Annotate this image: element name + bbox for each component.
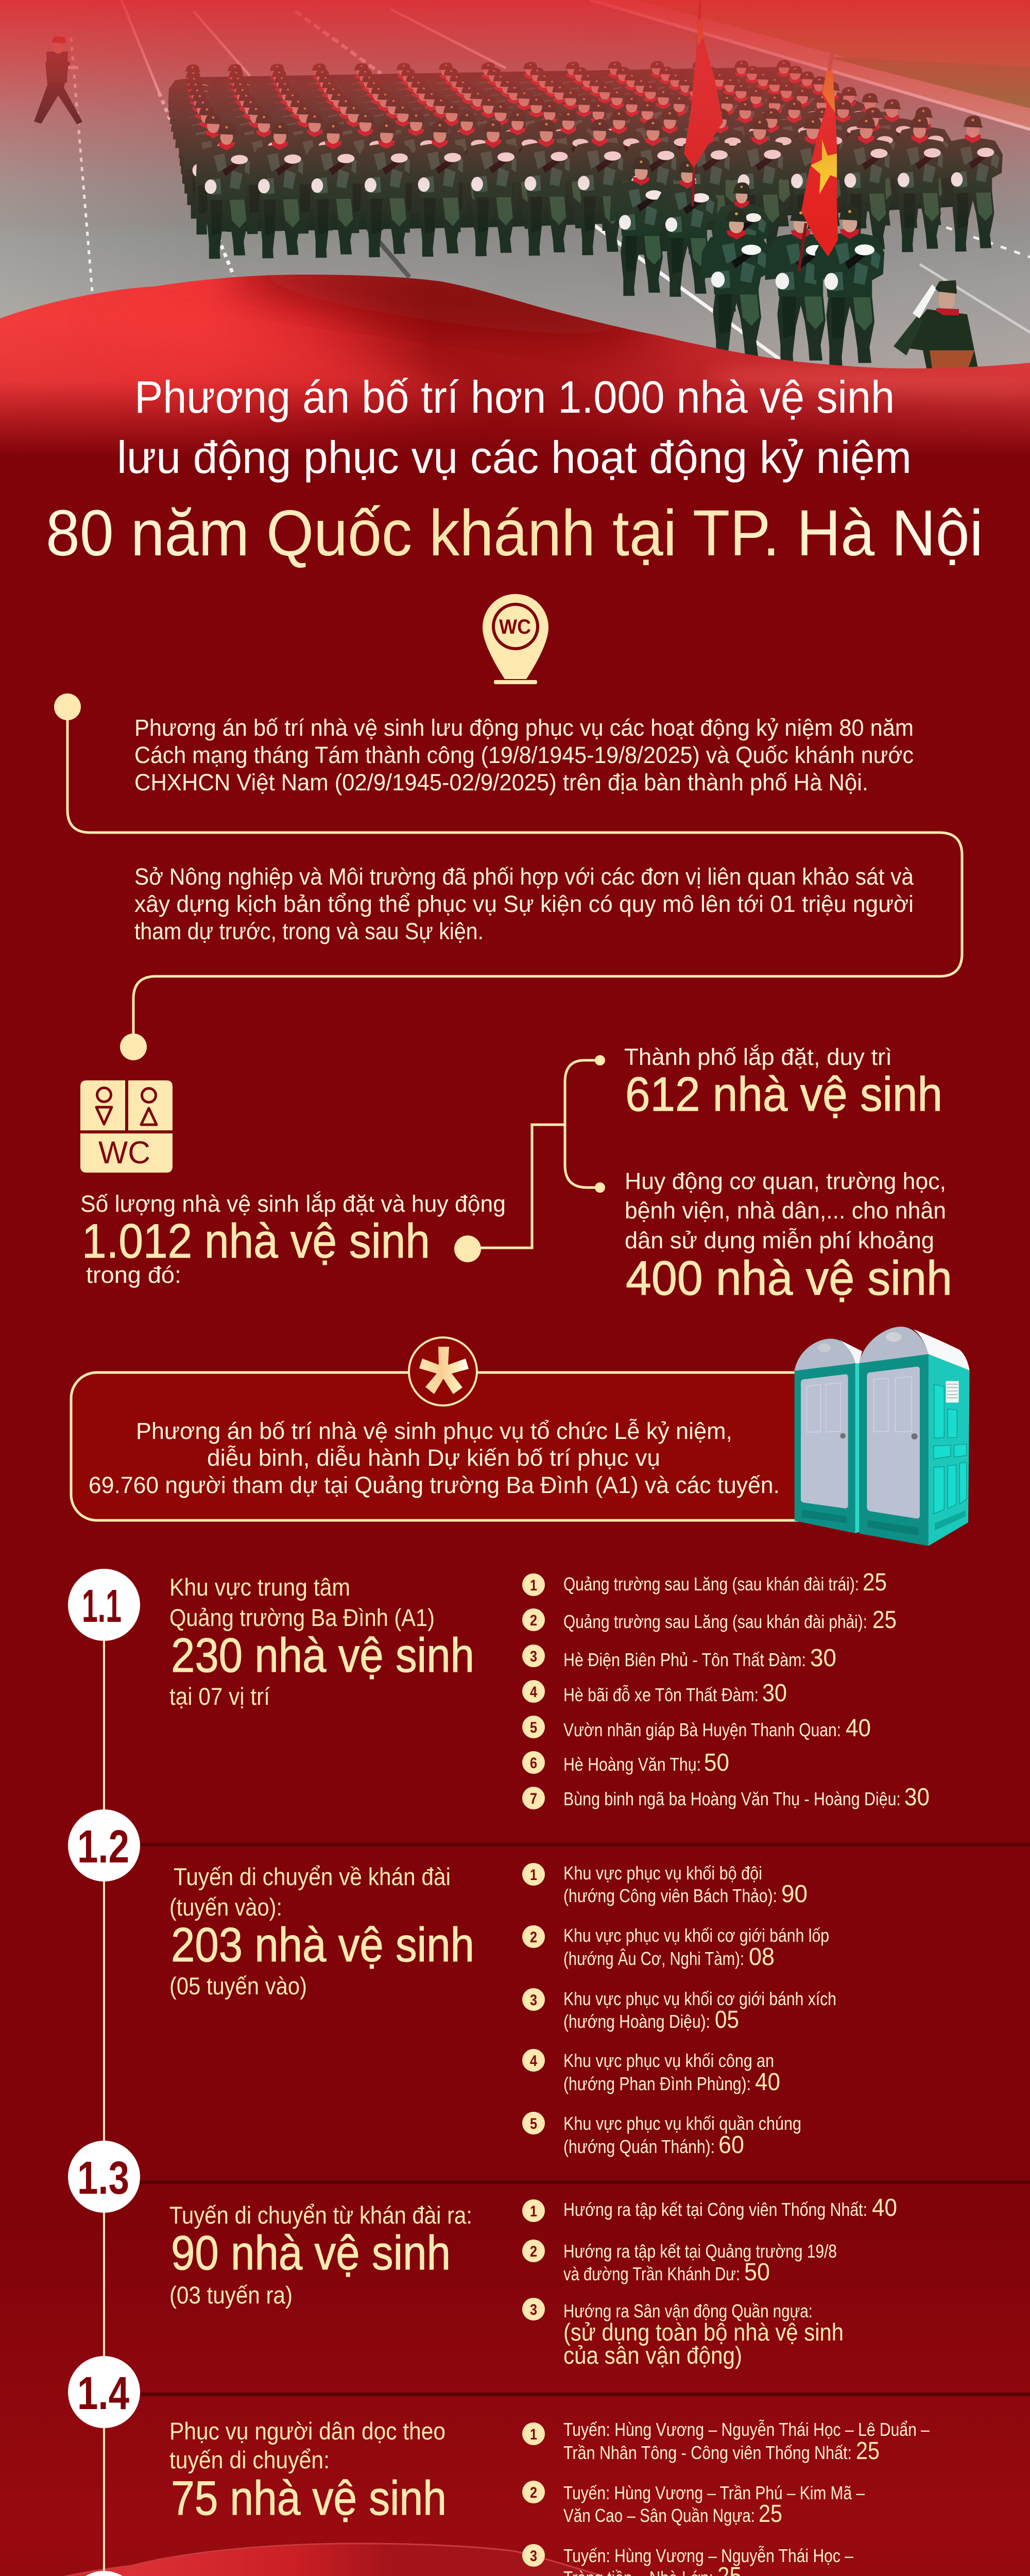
marching block of soldiers [168,60,1003,259]
list item 1.2.5: 5 [530,2115,537,2132]
callout text: Phương án bố trí nhà vệ sinh phục vụ tổ chức Lễ kỷ niệm, [136,1418,732,1444]
list item 1.1.2: Quảng trường sau Lăng (sau khán đài phải): [563,1611,867,1632]
icon: WC location pin [483,594,548,684]
list item 1.2.3: Khu vực phục vụ khối cơ giới bánh xích [563,1988,836,2009]
list item 1.1.5: 5 [530,1719,537,1736]
total count block: trong đó: [86,1262,181,1288]
list item 1.3.2: 2 [530,2243,537,2260]
list item 1.3.1: 1 [530,2203,537,2220]
text block: intro paragraph 2 [134,863,914,944]
text block: intro paragraph 2: xây dựng kịch bản tổng thể phục vụ Sự kiện có quy mô lên tới 01 triệu người [134,891,914,917]
list item 1.1.1 [522,1569,887,1596]
badge 1.2 [68,1809,140,1882]
list item 1.3.2: và đường Trần Khánh Dư: [563,2263,740,2284]
list item 1.1.6: 50 [704,1749,729,1776]
heading 1.3 [169,2201,472,2309]
branch: mobilised: bệnh viện, nhà dân,... cho nhân [625,1197,946,1224]
badge 1.2: 1.2 [77,1821,129,1873]
branch: city installed: 612 nhà vệ sinh [625,1067,942,1121]
title: lưu động phục vụ các hoạt động kỷ niệm [117,432,912,483]
red tint overlay on photo [0,0,1030,237]
list item 1.2.2 [522,1925,829,1971]
section 1.3 [68,2141,897,2369]
officer walking alongside [34,36,82,125]
heading 1.1 [169,1573,474,1710]
text block: intro paragraph 1: Cách mạng tháng Tám thành công (19/8/1945-19/8/2025) và Quốc khánh nước [134,742,914,768]
list item 1.4.2: Tuyến: Hùng Vương – Trần Phú – Kim Mã – [563,2482,865,2503]
list item 1.1.5 [522,1715,871,1742]
list item 1.4.1: Tuyến: Hùng Vương – Nguyễn Thái Học – Lê Duẩn – [563,2419,930,2440]
list item 1.1.6 [522,1749,729,1776]
bottom background glow [0,2215,1030,2576]
list item 1.1.5: Vườn nhãn giáp Bà Huyện Thanh Quan: [563,1719,841,1740]
list item 1.1.2 [522,1606,897,1634]
badge 1.1: 1.1 [82,1581,122,1632]
badge 1.5 [68,2571,140,2576]
title: Phương án bố trí hơn 1.000 nhà vệ sinh [134,371,895,422]
list item 1.1.4: 4 [530,1684,537,1701]
text block: intro paragraph 1 [134,715,914,795]
text block: intro paragraph 1: Phương án bố trí nhà vệ sinh lưu động phục vụ các hoạt động kỷ niệm 80 năm [134,715,914,741]
branch: mobilised: 400 nhà vệ sinh [626,1251,952,1305]
list item 1.3.3: 3 [530,2301,537,2318]
list item 1.2.4: 4 [530,2053,537,2070]
flag escort soldiers [610,157,884,367]
list item 1.1.6: Hè Hoàng Văn Thụ: [563,1754,701,1775]
heading 1.2: Tuyến di chuyển về khán đài [174,1863,451,1890]
connector line between intro paragraphs [54,693,962,1060]
list item 1.4.2: 25 [759,2500,782,2528]
list item 1.2.3: (hướng Hoàng Diệu): [563,2011,710,2032]
list item 1.4.1: 25 [856,2437,880,2465]
list item 1.3.3: Hướng ra Sân vận động Quần ngựa: [563,2300,813,2321]
section 1.5 [68,2571,739,2576]
heading 1.2: 203 nhà vệ sinh [171,1918,474,1972]
callout panel [71,1337,844,1520]
list item 1.2.4: (hướng Phan Đình Phùng): [563,2073,751,2094]
list item 1.4.3: Tuyến: Hùng Vương – Nguyễn Thái Học – [563,2545,853,2566]
list item 1.2.1: 1 [530,1867,537,1884]
heading 1.4: Phục vụ người dân dọc theo [169,2417,445,2445]
callout text: 69.760 người tham dự tại Quảng trường Ba Đình (A1) và các tuyến. [89,1472,780,1498]
title [46,371,983,569]
branch: city installed [624,1044,942,1121]
list item 1.2.1 [522,1862,808,1908]
heading 1.4: tuyến di chuyển: [169,2446,330,2473]
list item 1.1.1: 25 [863,1569,887,1596]
list item 1.2.5: (hướng Quán Thánh): [563,2136,715,2157]
list item 1.3.3 [522,2298,844,2369]
section 1.4 [68,2356,930,2576]
list item 1.1.4 [522,1680,787,1707]
branch: mobilised: Huy động cơ quan, trường học, [625,1168,946,1194]
callout text [89,1418,780,1498]
heading 1.4: 75 nhà vệ sinh [171,2471,447,2525]
list item 1.3.1 [522,2194,897,2222]
list item 1.2.2: 2 [530,1929,537,1946]
list item 1.1.7: 7 [530,1790,537,1807]
list item 1.3.2: 50 [744,2259,770,2286]
total count block [80,1191,506,1288]
timeline vertical line [103,1605,105,2576]
list item 1.2.4: Khu vực phục vụ khối công an [563,2050,774,2071]
branch: mobilised [625,1168,952,1305]
list item 1.4.2: Văn Cao – Sân Quần Ngựa: [563,2505,755,2526]
text block: intro paragraph 2: Sở Nông nghiệp và Môi trường đã phối hợp với các đơn vị liên quan khảo sát và [134,863,914,890]
list item 1.4.3 [522,2544,853,2576]
list item 1.1.1: 1 [530,1577,537,1594]
heading 1.4 [169,2417,447,2525]
branch: mobilised: dân sử dụng miễn phí khoảng [625,1227,934,1253]
text block: intro paragraph 2: tham dự trước, trong và sau Sự kiện. [134,918,484,944]
list item 1.1.4: Hè bãi đỗ xe Tôn Thất Đàm: [563,1684,759,1705]
callout text: diễu binh, diễu hành Dự kiến bố trí phục vụ [207,1445,660,1471]
badge 1.3: 1.3 [77,2153,129,2204]
list item 1.4.1: Trần Nhân Tông - Công viên Thống Nhất: [563,2442,852,2463]
list item 1.2.5 [522,2112,801,2159]
heading 1.1: 230 nhà vệ sinh [171,1628,474,1682]
icon: two portable toilets [795,1327,970,1546]
total count block: 1.012 nhà vệ sinh [82,1214,430,1268]
national flag with yellow star [799,50,838,271]
list item 1.1.3: 3 [530,1648,537,1665]
title: 80 năm Quốc khánh tại TP. Hà Nội [46,497,983,569]
list item 1.1.3: Hè Điện Biên Phủ - Tôn Thất Đàm: [563,1649,806,1670]
heading 1.3: 90 nhà vệ sinh [171,2226,451,2280]
list item 1.2.3: 05 [715,2006,739,2033]
top red flag wave [0,275,1030,450]
list item 1.2.2: (hướng Âu Cơ, Nghi Tàm): [563,1948,744,1969]
saluting soldier [894,280,978,371]
list item 1.1.2: 25 [872,1606,897,1634]
list item 1.2.4: 40 [755,2069,780,2096]
section dividers [140,1843,1030,2396]
icon: WC location pin: WC [499,616,531,638]
list item 1.2.1: (hướng Công viên Bách Thảo): [563,1885,777,1906]
section 1.2 [68,1809,836,2159]
heading 1.3: Tuyến di chuyển từ khán đài ra: [169,2201,472,2229]
icon: WC restroom sign [80,1080,173,1173]
heading 1.1: Quảng trường Ba Đình (A1) [169,1604,435,1631]
list item 1.3.2 [522,2240,837,2286]
badge 1.3 [68,2141,140,2213]
list item 1.4.3: 3 [530,2548,537,2565]
list item 1.2.4 [522,2049,780,2096]
list item 1.4.1: 1 [530,2426,537,2443]
list item 1.2.2: Khu vực phục vụ khối cơ giới bánh lốp [563,1925,829,1946]
list item 1.1.7: Bùng binh ngã ba Hoàng Văn Thụ - Hoàng Diệu: [563,1788,901,1809]
section 1.1 [68,1569,930,1811]
badge 1.1 [68,1569,140,1641]
heading 1.3: (03 tuyến ra) [169,2281,293,2309]
list item 1.1.6: 6 [530,1755,537,1772]
list item 1.3.1: 40 [872,2194,897,2222]
list item 1.1.3 [522,1645,836,1672]
hero photo: soldiers marching on parade road [0,0,1030,392]
list item 1.2.3: 3 [530,1992,537,2009]
list item 1.2.5: Khu vực phục vụ khối quần chúng [563,2113,801,2134]
list item 1.2.1: Khu vực phục vụ khối bộ đội [563,1862,762,1884]
heading 1.2 [169,1863,474,1999]
total count block: Số lượng nhà vệ sinh lắp đặt và huy động [80,1191,506,1217]
list item 1.4.2: 2 [530,2484,537,2501]
list item 1.3.2: Hướng ra tập kết tại Quảng trường 19/8 [563,2241,837,2262]
badge 1.4: 1.4 [77,2368,129,2419]
list item 1.4.2 [522,2481,865,2528]
list item 1.2.1: 90 [781,1880,808,1908]
list item 1.1.2: 2 [530,1612,537,1629]
list item 1.1.3: 30 [810,1645,836,1672]
list item 1.2.3 [522,1988,836,2033]
badge 1.4 [68,2356,140,2428]
heading 1.2: (tuyến vào): [169,1893,282,1921]
heading 1.1: Khu vực trung tâm [169,1573,350,1601]
list item 1.1.7 [522,1784,930,1811]
list item 1.4.1 [522,2419,930,2465]
red party flag [684,1,723,206]
branch: city installed: Thành phố lắp đặt, duy trì [624,1044,892,1070]
heading 1.2: (05 tuyến vào) [169,1972,307,1999]
list item 1.3.3: của sân vận động) [563,2342,742,2369]
text block: intro paragraph 1: CHXHCN Việt Nam (02/9/1945-02/9/2025) trên địa bàn thành phố Hà Nội. [134,769,868,795]
list item 1.3.3: (sử dụng toàn bộ nhà vệ sinh [563,2318,844,2346]
connector: total to branches [454,1055,605,1262]
list item 1.1.1: Quảng trường sau Lăng (sau khán đài trái): [563,1573,859,1595]
list item 1.1.7: 30 [904,1784,930,1811]
list item 1.2.5: 60 [718,2131,744,2159]
bottom red wave [64,2543,605,2576]
icon: asterisk badge [409,1337,477,1405]
icon: WC restroom sign: WC [98,1135,150,1170]
list item 1.1.5: 40 [846,1715,871,1742]
heading 1.1: tại 07 vị trí [169,1683,270,1710]
list item 1.1.4: 30 [762,1680,787,1707]
list item 1.2.2: 08 [749,1943,775,1971]
list item 1.3.1: Hướng ra tập kết tại Công viên Thống Nhất: [563,2199,867,2220]
